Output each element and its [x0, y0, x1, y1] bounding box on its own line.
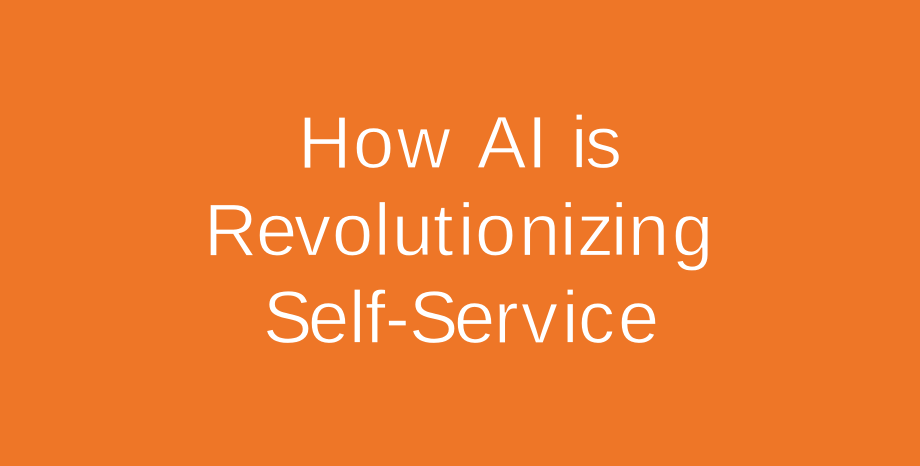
title: Revolutionizing — [204, 188, 713, 272]
title — [0, 101, 713, 359]
title: Self-Service — [263, 276, 659, 359]
title: How AI is — [0, 101, 622, 184]
